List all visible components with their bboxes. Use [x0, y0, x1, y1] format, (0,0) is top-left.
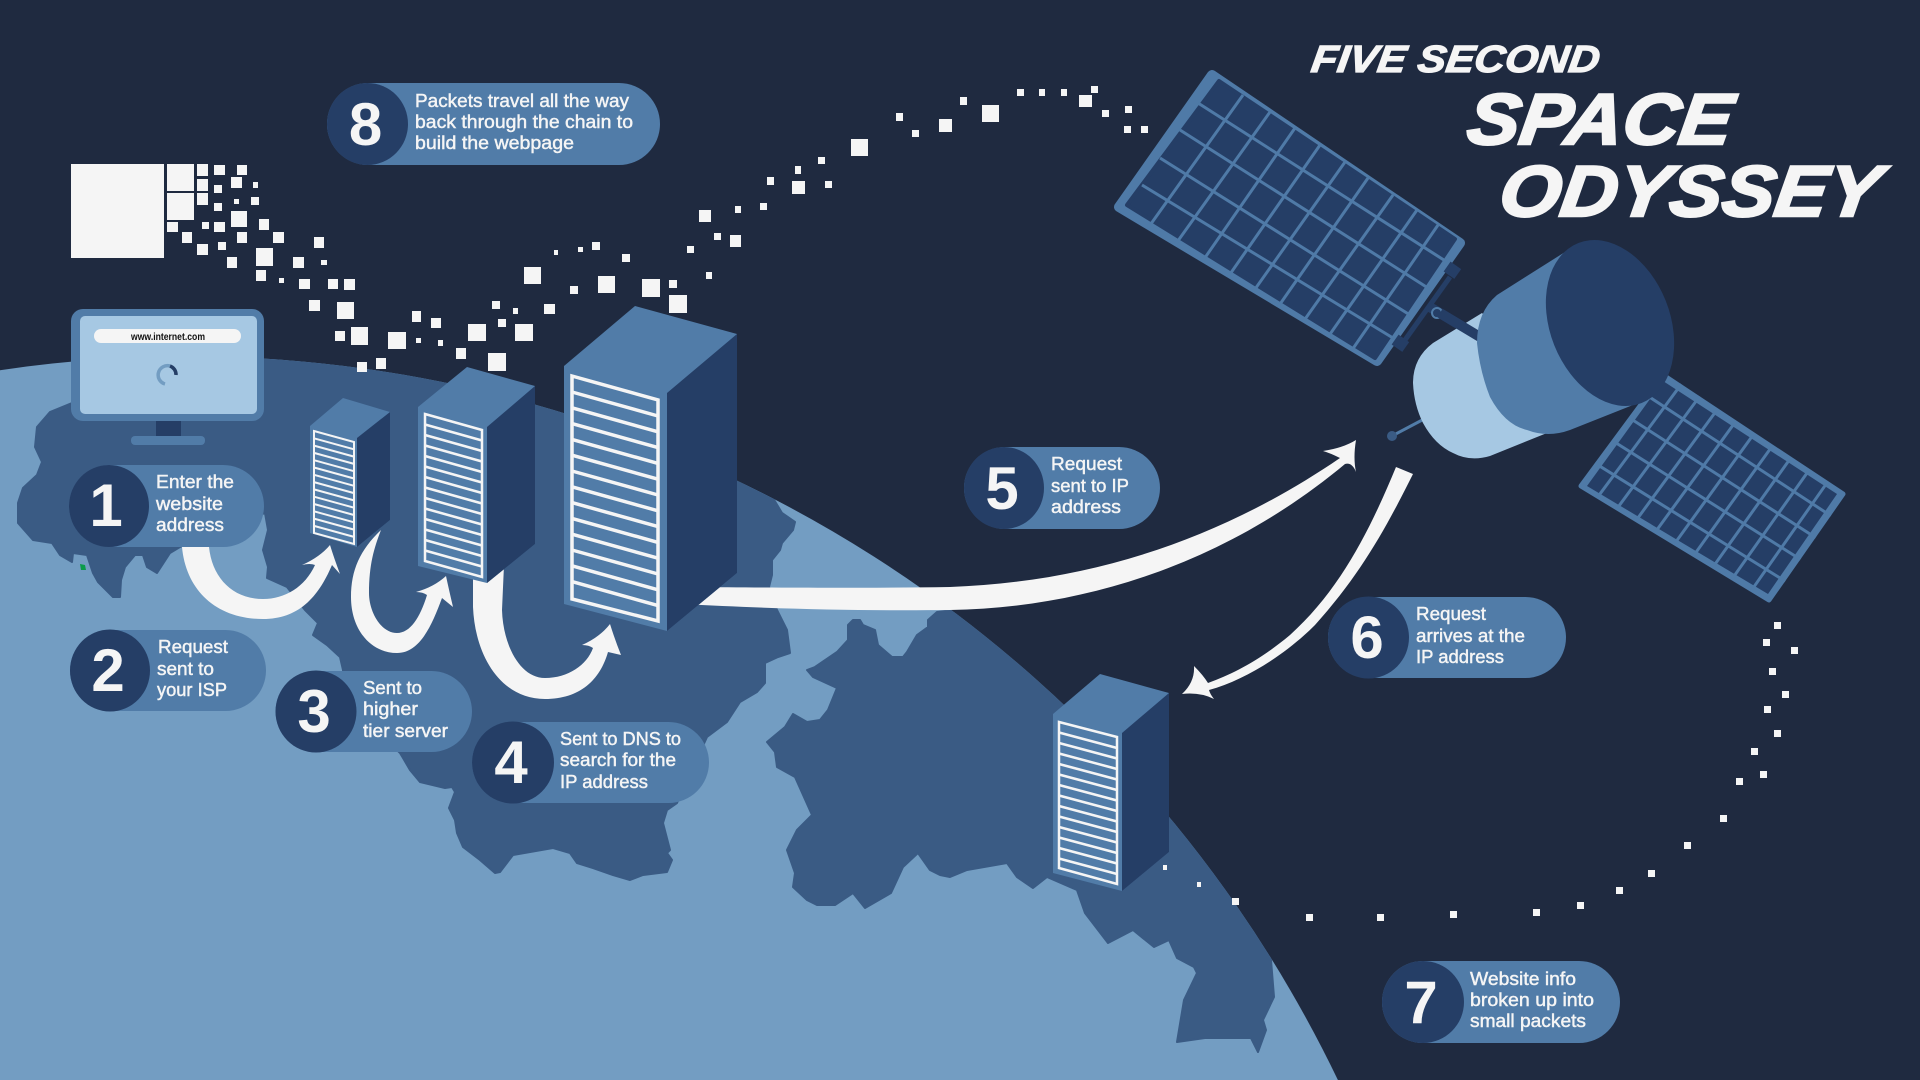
icon: computer monitor: www.internet.com [130, 331, 205, 343]
step 3 callout: tier server [363, 720, 448, 741]
satellite strut over body [1440, 313, 1480, 337]
step 4 callout: search for the [560, 749, 676, 770]
server: DNS [564, 306, 737, 631]
globe [0, 358, 1338, 1080]
step 8 callout: back through the chain to [415, 111, 633, 132]
satellite body: middle section [1477, 252, 1640, 434]
step 4 callout [472, 722, 709, 804]
panel bracket and strut [1392, 262, 1478, 352]
step 5 callout: Request [1051, 453, 1122, 474]
step 2 callout: sent to [157, 658, 214, 679]
step 8 callout: build the webpage [415, 132, 574, 153]
arrow: ISP to higher tier [351, 530, 453, 653]
step 7 callout: broken up into [1470, 989, 1594, 1010]
solar panel: upper left [1119, 75, 1460, 361]
step 2 callout [70, 630, 266, 712]
step 8 callout [327, 83, 660, 165]
arrow: browser to ISP [182, 545, 340, 619]
step 3 callout [276, 670, 472, 752]
icon: computer monitor [71, 309, 264, 445]
server: higher tier [418, 367, 535, 583]
land: left continent [17, 358, 796, 881]
step 8 callout: 8 [349, 91, 382, 158]
step 5 callout: sent to IP [1051, 475, 1129, 496]
step 1 callout: address [156, 514, 224, 535]
step 1 callout [69, 465, 264, 547]
packets: webpage breaking into squares and returning [71, 86, 1148, 372]
step 6 callout [1328, 596, 1566, 678]
step 1 callout: Enter the [156, 471, 234, 492]
step 7 callout: small packets [1470, 1010, 1586, 1031]
step 7 callout: 7 [1404, 969, 1438, 1036]
title [1309, 38, 1892, 232]
island marker [80, 564, 86, 570]
step 5 callout [964, 447, 1160, 529]
step 6 callout: Request [1416, 603, 1486, 624]
step 5 callout: address [1051, 496, 1121, 517]
step 7 callout [1382, 961, 1620, 1043]
step 4 callout: IP address [560, 771, 648, 792]
step 4 callout: 4 [494, 729, 528, 796]
step 1 callout: 1 [89, 472, 123, 539]
solar panel: lower right [1581, 375, 1843, 600]
step 2 callout: Request [158, 636, 228, 657]
server: website host [1053, 674, 1169, 891]
step 3 callout: 3 [297, 678, 331, 745]
step 2 callout: 2 [91, 637, 125, 704]
step 2 callout: your ISP [157, 679, 227, 700]
step 3 callout: Sent to [363, 677, 422, 698]
step 3 callout: higher [363, 698, 418, 719]
packets: trail from server around to satellite [1163, 622, 1798, 921]
title: SPACE [1463, 80, 1741, 160]
server: small ISP [310, 398, 390, 547]
step 6 callout: 6 [1350, 604, 1384, 671]
step 5 callout: 5 [985, 455, 1019, 522]
step 1 callout: website [155, 493, 223, 514]
antenna [1387, 418, 1426, 441]
title: FIVE SECOND [1309, 38, 1603, 81]
arrow: DNS to satellite [680, 440, 1356, 610]
land: right continent [766, 610, 1275, 1053]
arrow: higher tier to DNS [473, 565, 621, 699]
step 7 callout: Website info [1470, 968, 1576, 989]
satellite dish face [1523, 221, 1697, 425]
title: ODYSSEY [1495, 152, 1892, 232]
step 8 callout: Packets travel all the way [415, 90, 630, 111]
satellite [1119, 75, 1843, 600]
step 6 callout: IP address [1416, 646, 1504, 667]
arrow: satellite to web server [1182, 467, 1413, 699]
satellite body: rear section [1413, 313, 1547, 458]
step 4 callout: Sent to DNS to [560, 728, 681, 749]
step 6 callout: arrives at the [1416, 625, 1525, 646]
